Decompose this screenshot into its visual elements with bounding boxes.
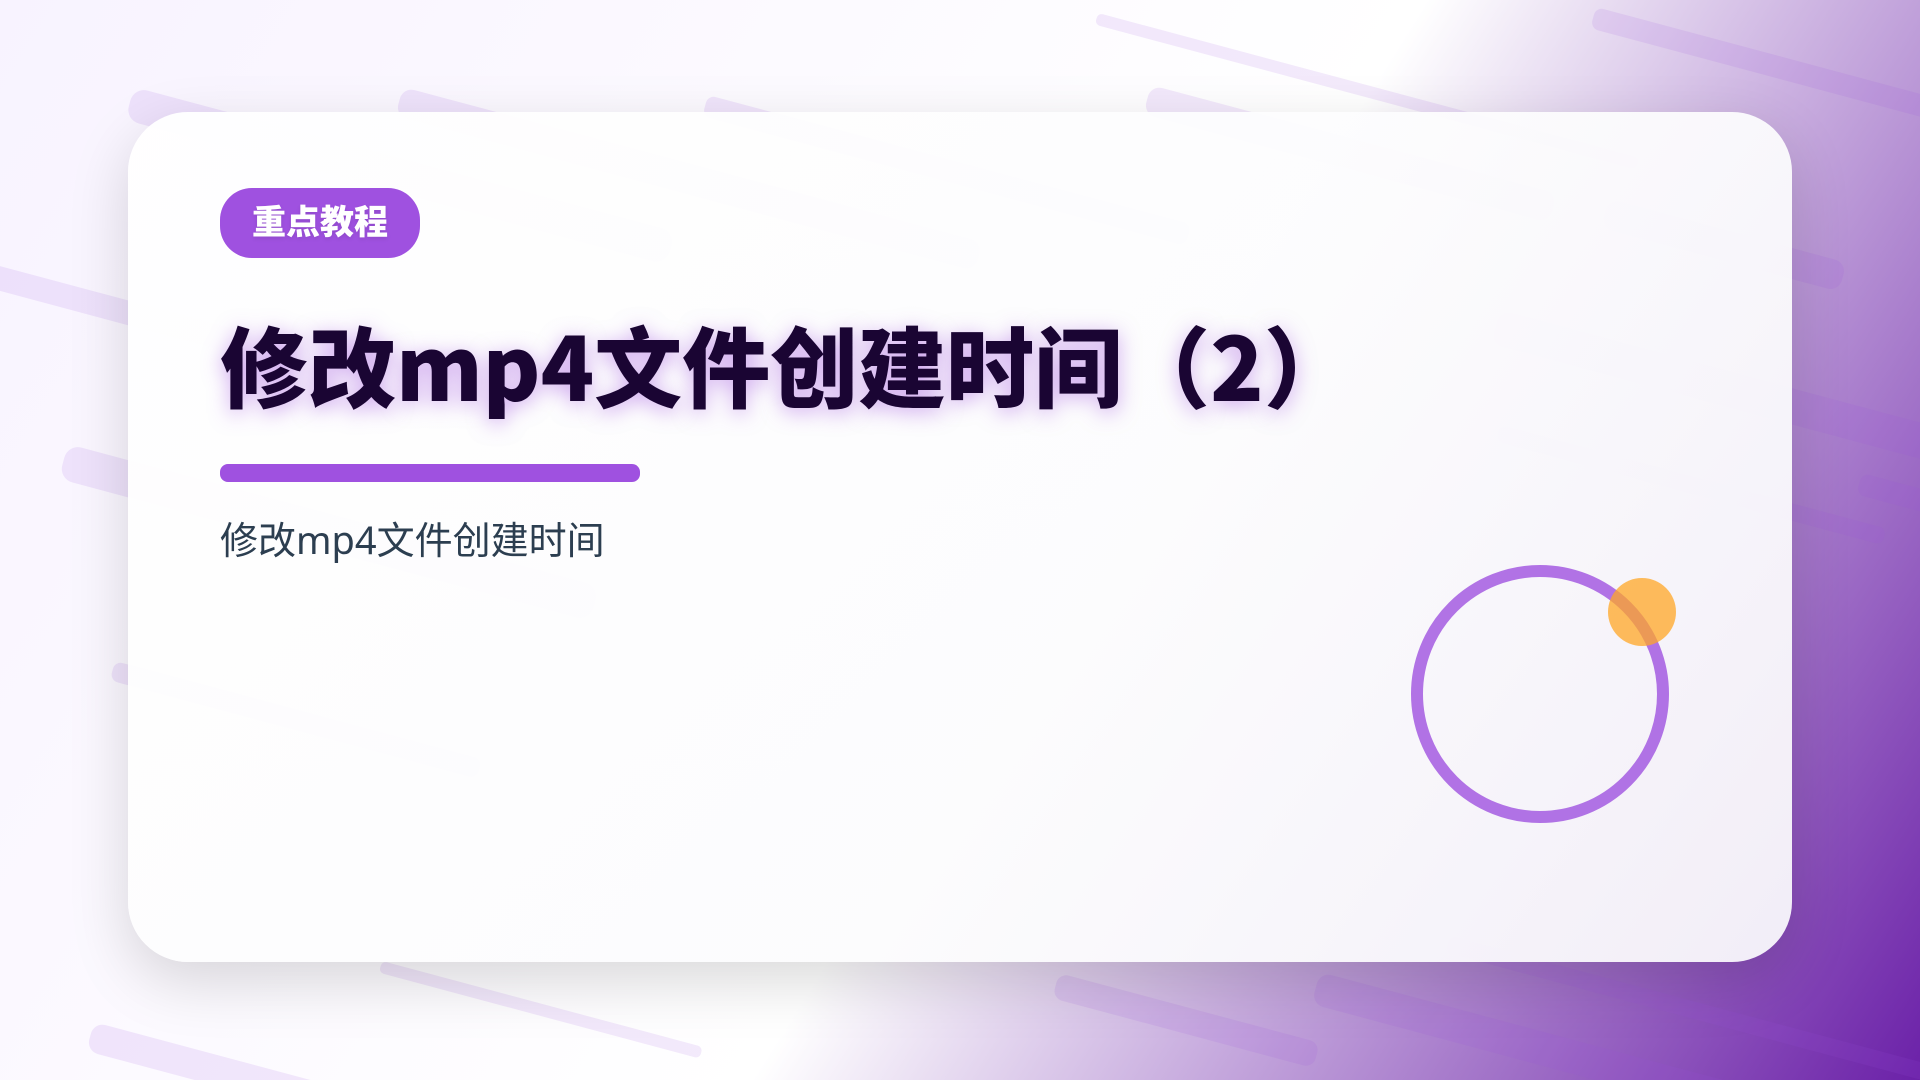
icon: decorative purple ring (1411, 565, 1669, 823)
panel: main card (128, 112, 1792, 962)
accent bar under title (220, 464, 640, 482)
badge: 重点教程 (220, 188, 420, 258)
icon: orange dot (1608, 578, 1676, 646)
badge: 重点教程: 重点教程 (252, 195, 388, 244)
title: 修改mp4文件创建时间（2） (220, 300, 1352, 427)
subtitle: 修改mp4文件创建时间 (220, 514, 605, 566)
